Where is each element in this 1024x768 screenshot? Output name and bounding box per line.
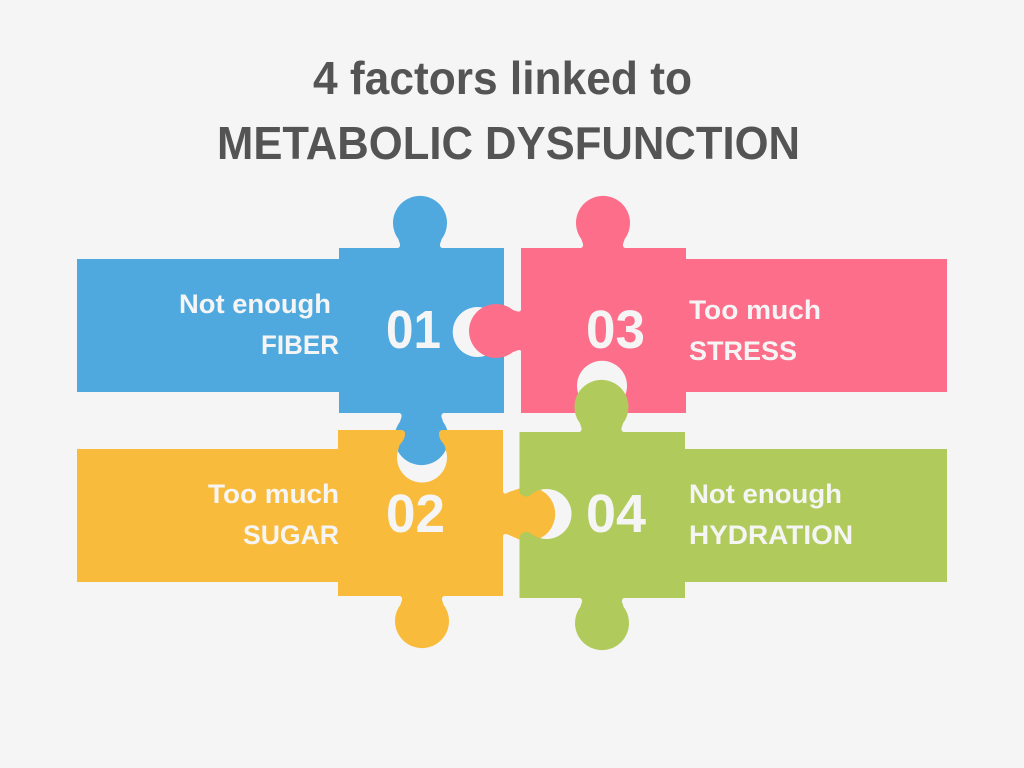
puzzle piece: blue: [77, 196, 504, 465]
panel: factor 02 too much sugar: SUGAR: [243, 520, 339, 550]
panel: factor 03 too much stress: [469, 196, 947, 413]
label: too much sugar: Too much: [208, 479, 339, 509]
panel: factor 03 too much stress: STRESS: [689, 336, 797, 366]
title: METABOLIC DYSFUNCTION: [217, 117, 800, 169]
title: [217, 52, 800, 169]
label: not enough fiber: Not enough: [179, 289, 331, 319]
puzzle piece: yellow: [77, 430, 555, 648]
number 03: 03: [586, 300, 645, 360]
panel: factor 02 too much sugar: [77, 430, 555, 648]
title: 4 factors linked to: [313, 52, 692, 104]
number 01: 01: [386, 300, 441, 360]
label: too much stress: Too much: [689, 295, 821, 325]
number 04: 04: [586, 484, 646, 544]
panel: factor 04 not enough hydration: [520, 380, 947, 650]
panel: factor 01 not enough fiber: FIBER: [261, 330, 339, 360]
number 02: 02: [386, 484, 445, 544]
puzzle piece: pink: [469, 196, 947, 413]
puzzle piece: green: [520, 380, 947, 650]
label: not enough hydration: Not enough: [689, 479, 842, 509]
panel: factor 01 not enough fiber: [77, 196, 504, 465]
panel: factor 04 not enough hydration: HYDRATION: [689, 520, 853, 550]
